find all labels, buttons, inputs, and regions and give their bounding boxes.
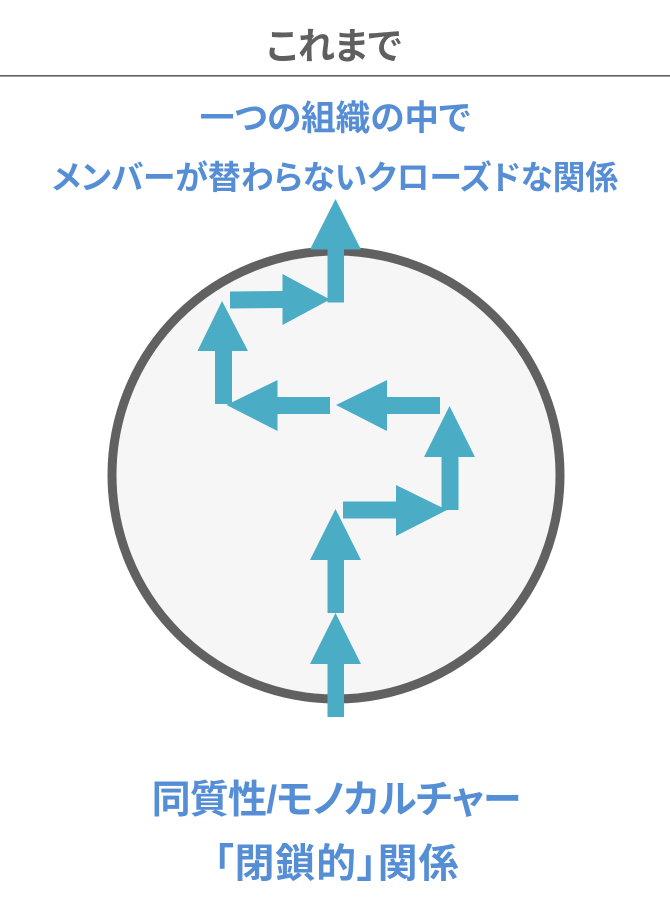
bottom caption [152, 779, 520, 886]
arrow 5: left [336, 380, 440, 431]
title: これまで [267, 26, 401, 67]
arrow 9: exiting through top [310, 199, 361, 302]
arrow 3: right [343, 485, 447, 536]
title underline [0, 75, 670, 77]
arrow 2: up [310, 509, 361, 613]
subheading: メンバーが替わらないクローズドな関係 [52, 159, 618, 196]
subheading: 一つの組織の中で [200, 100, 470, 138]
bottom caption: 同質性/モノカルチャー [152, 779, 520, 822]
arrow path [198, 199, 475, 717]
arrow 8: right [230, 274, 330, 325]
subheading [52, 100, 618, 196]
arrow 1: entering from bottom [310, 613, 361, 717]
closed circle [112, 251, 560, 699]
arrow 7: up [198, 301, 248, 404]
bottom caption: 「閉鎖的」関係 [214, 842, 459, 886]
arrow 4: up [424, 406, 475, 510]
arrow 6: left [226, 380, 330, 431]
